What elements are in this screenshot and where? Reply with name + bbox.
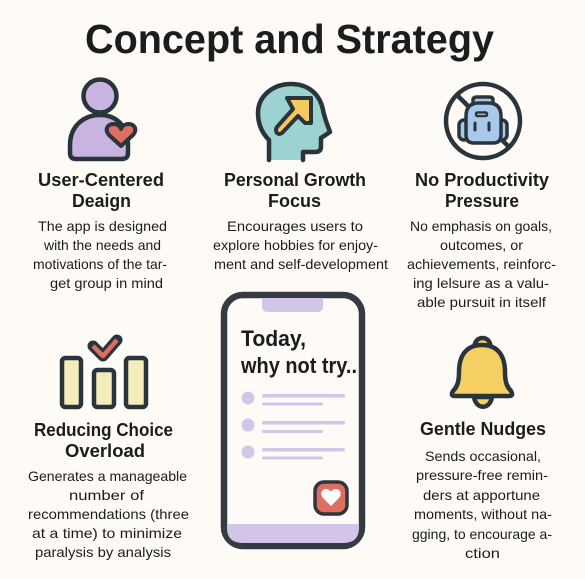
text: user-centered description (33, 218, 167, 291)
panel: phone mockup (224, 295, 362, 546)
phone headline: why not try.. (240, 353, 357, 378)
heading: no productivity pressure: Pressure (445, 191, 519, 211)
text: no productivity description: achievements, reinforc- (407, 256, 556, 272)
text: gentle nudges description: ders at apportune (423, 487, 540, 503)
title: Concept and Strategy (85, 16, 494, 62)
text: no productivity description: able pursuit in itself (417, 294, 546, 310)
text: user-centered description: The app is designed (38, 218, 167, 234)
text: no productivity description: No emphasis on goals, (410, 218, 552, 234)
heading: user-centered design (38, 170, 164, 211)
text: reducing choice description (28, 468, 189, 560)
text: gentle nudges description (412, 448, 552, 561)
panel: gentle nudges (412, 338, 552, 561)
text: gentle nudges description: pressure-free remin- (416, 467, 548, 483)
text: no productivity description: ing lelsure as a valu- (413, 275, 549, 291)
text: personal growth description: explore hobbies for enjoy- (213, 237, 378, 253)
text: personal growth description: Encourages users to (227, 218, 363, 234)
panel: no productivity pressure (407, 84, 556, 310)
heading: reducing choice overload: Overload (65, 441, 145, 461)
text: gentle nudges description: gging, to encourage a- (412, 526, 552, 542)
text: no productivity description: outcomes, or (440, 237, 523, 253)
heading: personal growth focus (224, 170, 366, 211)
panel: personal growth focus (213, 84, 388, 272)
text: reducing choice description: paralysis by analysis (35, 544, 171, 560)
text: user-centered description: get group in mind (50, 275, 163, 291)
heading: user-centered design: User-Centered (38, 170, 164, 190)
heart button (315, 482, 347, 514)
list item 1 (242, 392, 345, 406)
heading: personal growth focus: Focus (268, 191, 321, 211)
text: gentle nudges description: Sends occasional, (425, 448, 541, 464)
icon: head with arrow (258, 84, 330, 160)
phone notch (262, 298, 323, 312)
text: reducing choice description: number of (69, 487, 144, 503)
phone headline: Today, (241, 326, 306, 351)
heading: no productivity pressure: No Productivity (415, 170, 549, 190)
heading: reducing choice overload (34, 420, 173, 461)
icon: three bars with check (62, 340, 146, 407)
heading: gentle nudges: Gentle Nudges (420, 419, 546, 439)
heading: personal growth focus: Personal Growth (224, 170, 366, 190)
text: no productivity description (407, 218, 556, 310)
text: user-centered description: with the needs and (43, 237, 161, 253)
phone bottom bar (227, 524, 359, 543)
panel: user-centered design (33, 80, 167, 291)
text: reducing choice description: recommendations (three (28, 506, 189, 522)
text: gentle nudges description: ction (465, 545, 500, 561)
icon: bell (452, 338, 512, 407)
text: user-centered description: motivations of the tar- (33, 256, 167, 272)
icon: crossed-out backpack (446, 84, 520, 158)
text: personal growth description: ment and self-development (214, 256, 388, 272)
heading: user-centered design: Deaign (72, 191, 131, 211)
heading: reducing choice overload: Reducing Choice (34, 420, 173, 440)
panel: reducing choice overload (28, 340, 189, 560)
text: reducing choice description: at a time) to minimize (32, 525, 182, 541)
phone body (224, 295, 362, 546)
text: personal growth description (213, 218, 388, 272)
list item 3 (242, 446, 345, 460)
heading: no productivity pressure (415, 170, 549, 211)
text: reducing choice description: Generates a manageable (28, 468, 187, 484)
icon: person with heart (70, 80, 135, 159)
text: gentle nudges description: moments, without na- (414, 506, 552, 522)
list item 2 (242, 418, 345, 433)
phone headline (240, 326, 357, 378)
